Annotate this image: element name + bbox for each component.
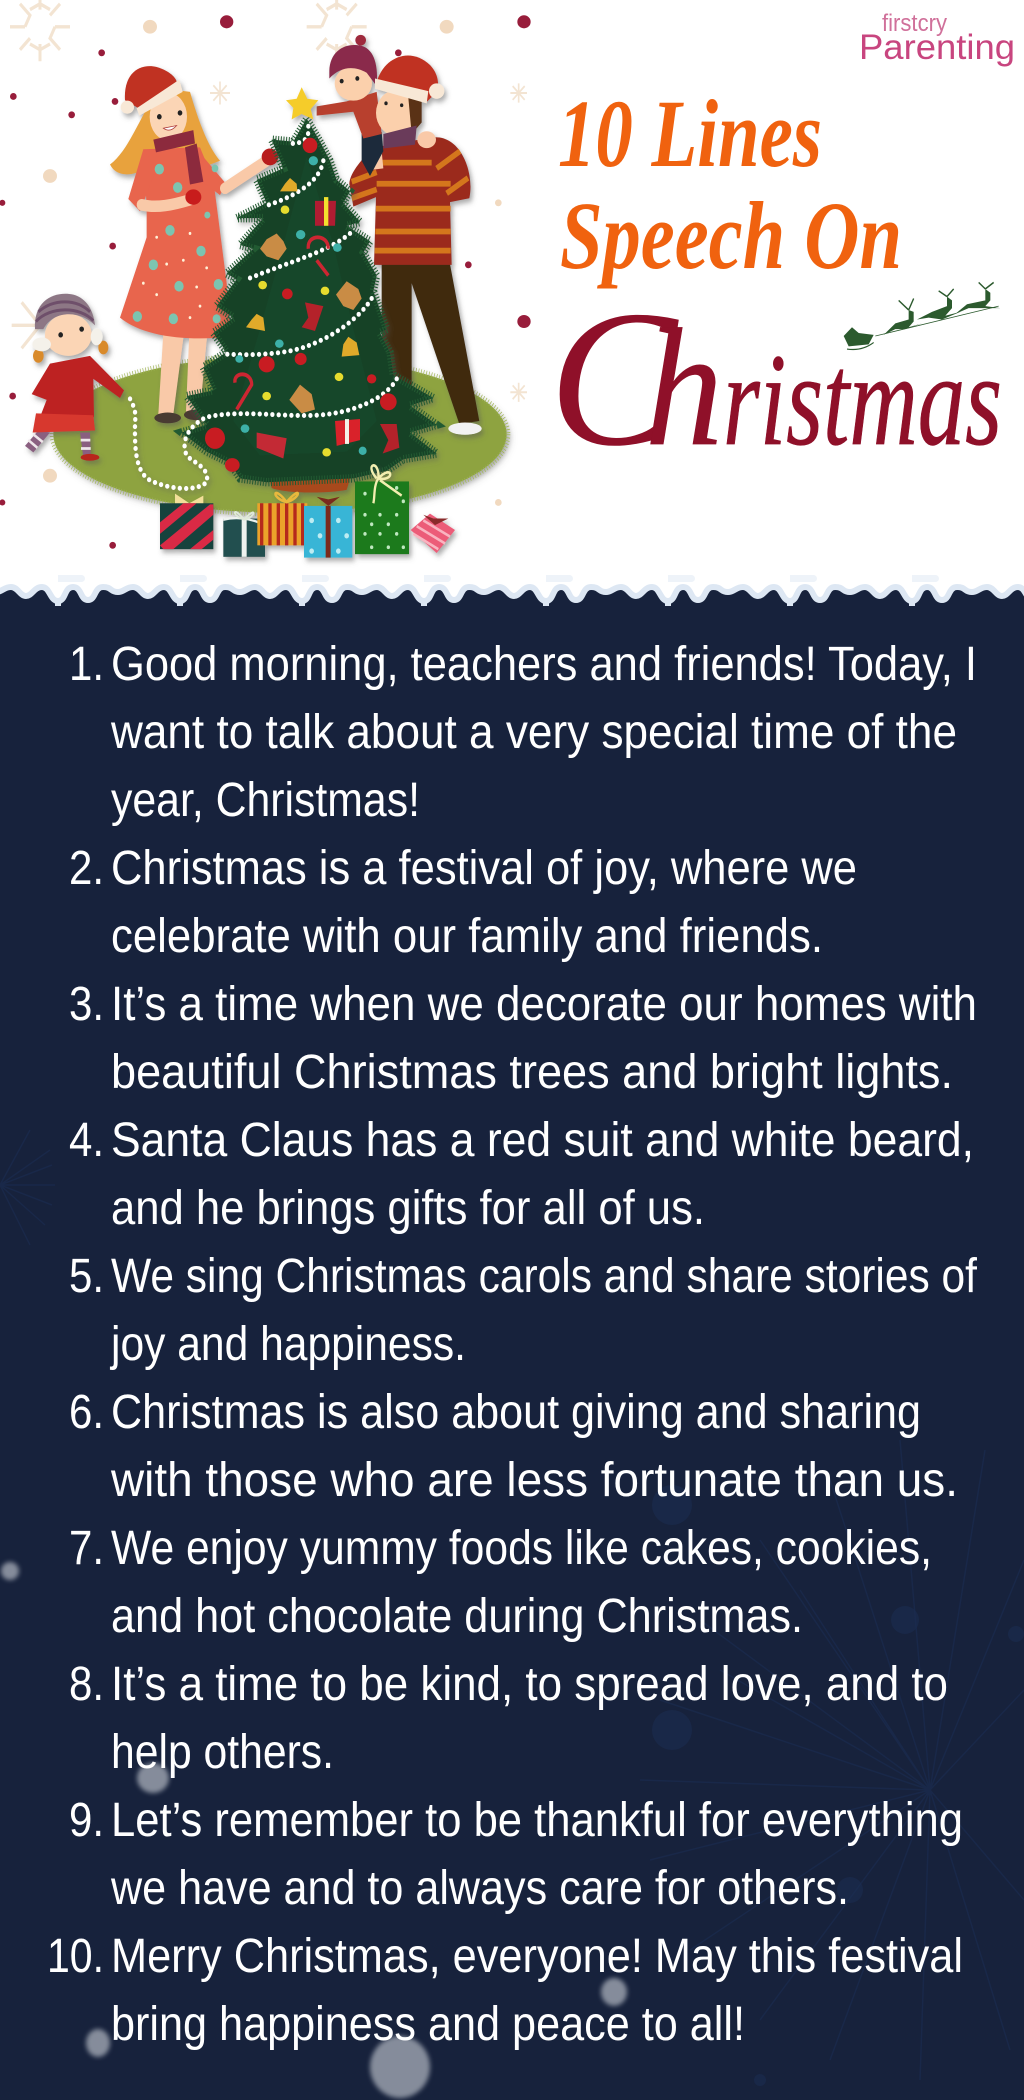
line 3: [69, 978, 977, 1099]
line 7: [69, 1522, 932, 1643]
icicle snow border: [0, 570, 1024, 610]
line 5: [69, 1250, 978, 1371]
title word: Christmas: h: [645, 295, 723, 481]
line 9: [69, 1794, 963, 1915]
logo: FirstCry Parenting: [859, 10, 1015, 67]
line 9: we have and to always care for others.: [110, 1862, 849, 1915]
line 8: [69, 1658, 948, 1779]
gift: blue with brown ribbon: [304, 497, 352, 558]
line 1: want to talk about a very special time of the: [110, 706, 957, 759]
title word: Christmas: C: [549, 271, 679, 487]
line 10: bring happiness and peace to all!: [111, 1998, 745, 2051]
line 6: 6.: [69, 1386, 104, 1439]
gift: striped red and green: [160, 494, 213, 549]
line 8: It’s a time to be kind, to spread love, and to: [111, 1658, 948, 1711]
line 5: joy and happiness.: [109, 1318, 466, 1371]
line 10: 10.: [47, 1930, 104, 1983]
line 5: 5.: [69, 1250, 104, 1303]
gift boxes: [160, 465, 455, 558]
line 2: 2.: [69, 842, 104, 895]
line 6: [69, 1386, 958, 1507]
panel: dark speech background: [0, 608, 1024, 2100]
line 2: celebrate with our family and friends.: [111, 910, 823, 963]
line 1: year, Christmas!: [111, 774, 420, 827]
logo: FirstCry Parenting: Parenting: [859, 28, 1015, 67]
woman in red dress: [110, 66, 278, 423]
line 1: 1.: [69, 638, 104, 691]
title line: Speech On: Speech On: [560, 182, 902, 289]
bokeh snow circles: [1, 1562, 627, 2098]
line 2: Christmas is a festival of joy, where we: [111, 842, 857, 895]
gift: green polka dot: [355, 465, 409, 554]
title block: [549, 80, 1002, 487]
title word: Christmas: [549, 271, 1002, 487]
line 8: 8.: [69, 1658, 104, 1711]
line 2: [69, 842, 857, 963]
green ground ellipse: [52, 355, 508, 514]
gift: orange stripes: [257, 493, 307, 545]
line 4: and he brings gifts for all of us.: [111, 1182, 705, 1235]
line 9: 9.: [69, 1794, 104, 1847]
page background white: [0, 0, 1024, 610]
title line: 10 Lines: 10 Lines: [558, 80, 822, 187]
line 3: 3.: [69, 978, 104, 1031]
speech list: [47, 638, 978, 2051]
line 8: help others.: [111, 1726, 334, 1779]
little girl with garland: [25, 294, 124, 461]
line 6: Christmas is also about giving and sharing: [111, 1386, 921, 1439]
line 7: We enjoy yummy foods like cakes, cookies,: [111, 1522, 932, 1575]
line 9: Let’s remember to be thankful for everything: [111, 1794, 963, 1847]
logo: FirstCry Parenting: firstcry: [882, 10, 947, 37]
tree ornaments: [205, 138, 399, 472]
icon: Santa sleigh and reindeer: [844, 282, 1000, 349]
tree garlands: [128, 126, 397, 488]
line 10: [47, 1930, 963, 2051]
line 4: Santa Claus has a red suit and white beard,: [111, 1114, 974, 1167]
line 3: beautiful Christmas trees and bright lights.: [111, 1046, 953, 1099]
man carrying boy: [317, 35, 482, 435]
line 1: [69, 638, 977, 827]
Christmas tree: [128, 87, 437, 493]
line 7: and hot chocolate during Christmas.: [111, 1590, 803, 1643]
line 4: 4.: [69, 1114, 104, 1167]
gift: pink tilted: [411, 514, 455, 553]
line 7: 7.: [69, 1522, 104, 1575]
background snowflakes and dots: [0, 0, 531, 549]
line 4: [69, 1114, 974, 1235]
line 6: with those who are less fortunate than us.: [110, 1454, 958, 1507]
gift: teal with white ribbon: [223, 512, 265, 557]
illustration: family decorating Christmas tree: [0, 0, 531, 558]
tree star: [286, 87, 318, 119]
